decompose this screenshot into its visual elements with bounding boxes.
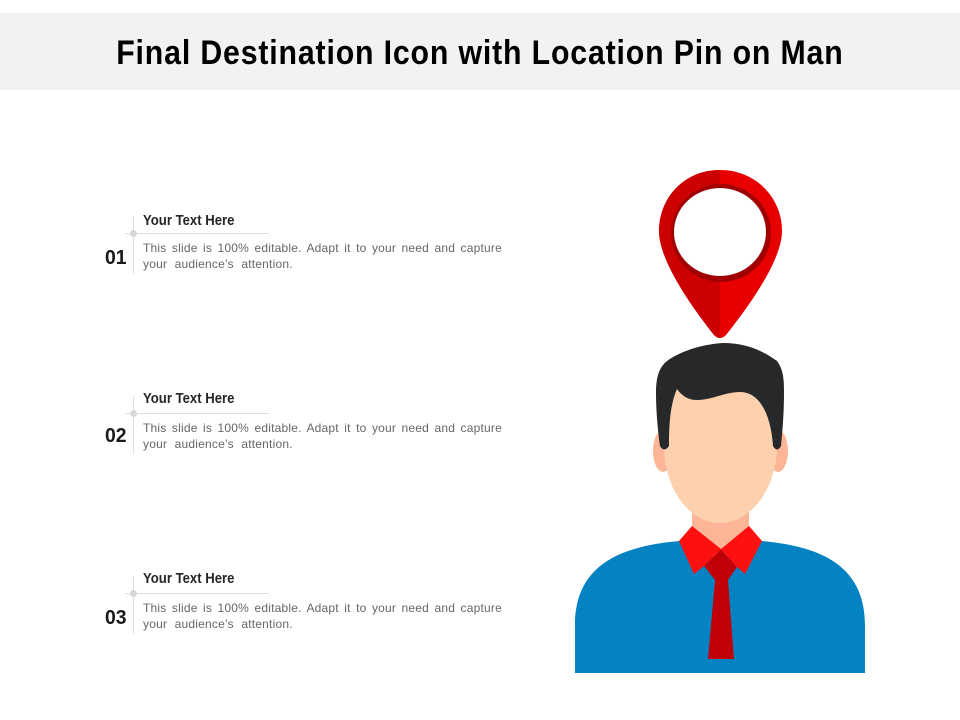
face bbox=[664, 380, 777, 523]
body text 01 bbox=[143, 241, 502, 271]
marker 02 bbox=[125, 396, 269, 454]
marker 03 bbox=[125, 576, 269, 634]
heading 02: Your Text Here bbox=[143, 390, 234, 407]
tie bbox=[704, 549, 737, 659]
body text 02 bbox=[143, 421, 502, 451]
icon: man bbox=[575, 343, 865, 673]
collar bbox=[679, 526, 762, 574]
title: Final Destination Icon with Location Pin on Man bbox=[116, 34, 844, 72]
marker 01 bbox=[125, 216, 269, 274]
body text 01: your audience’s attention. bbox=[143, 257, 293, 271]
body text 02: your audience’s attention. bbox=[143, 437, 293, 451]
neck bbox=[692, 505, 749, 552]
body text 03: your audience’s attention. bbox=[143, 617, 293, 631]
body text 01: This slide is 100% editable. Adapt it to your need and capture bbox=[143, 241, 502, 255]
number 01: 01 bbox=[105, 247, 127, 269]
body text 03 bbox=[143, 601, 502, 631]
number 02: 02 bbox=[105, 425, 127, 447]
icon: location pin bbox=[659, 170, 782, 338]
text item 02 bbox=[105, 390, 502, 454]
title banner bbox=[0, 13, 960, 90]
ears bbox=[653, 430, 673, 472]
text item 01 bbox=[105, 212, 502, 274]
number 03: 03 bbox=[105, 607, 127, 629]
shirt bbox=[575, 541, 865, 673]
heading 01: Your Text Here bbox=[143, 212, 234, 229]
body text 02: This slide is 100% editable. Adapt it to your need and capture bbox=[143, 421, 502, 435]
text item 03 bbox=[105, 570, 502, 634]
body text 03: This slide is 100% editable. Adapt it to your need and capture bbox=[143, 601, 502, 615]
hair bbox=[656, 343, 784, 450]
heading 03: Your Text Here bbox=[143, 570, 234, 587]
